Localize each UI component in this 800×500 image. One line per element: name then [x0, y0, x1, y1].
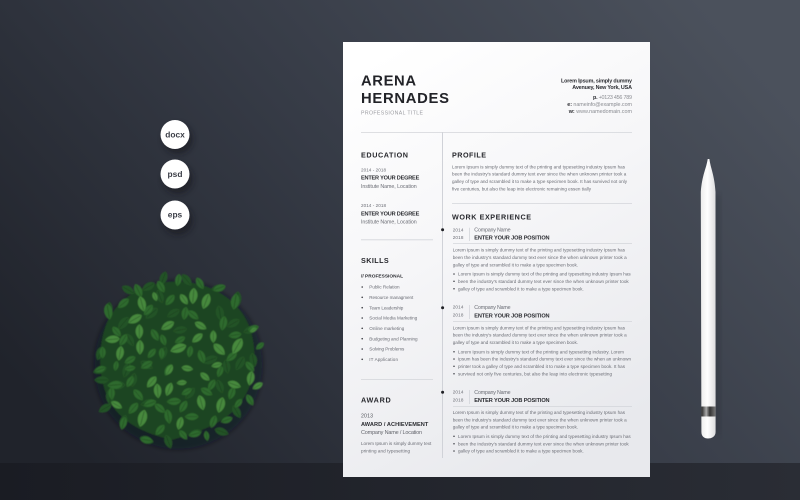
job entry 1: galley of type and scrambled it to make a type specimen book.: [458, 286, 584, 291]
job entry 2: galley of type and scrambled it to make a type specimen book.: [453, 340, 578, 345]
badge: psd: psd: [168, 169, 182, 179]
name: HERNADES: [361, 91, 449, 107]
job entry 3: galley of type and scrambled it to make a type specimen book.: [453, 425, 578, 430]
job entry 3: 2014: [453, 390, 464, 395]
contact details: Avenuey, New York, USA: [572, 85, 632, 91]
job entry 1: been the industry's standard dummy text ever since the when unknown printer took: [458, 279, 629, 284]
badge: eps: eps: [168, 209, 183, 219]
award section: [361, 395, 432, 453]
job entry 1: been the industry's standard dummy text ever since the when unknown printer took a: [453, 255, 627, 260]
resume paper: [343, 42, 650, 477]
skills section: // PROFESSIONAL: [361, 274, 403, 280]
pencil: [701, 159, 720, 438]
job entry 3: 2018: [453, 397, 464, 402]
work experience heading: WORK EXPERIENCE: [452, 212, 531, 221]
skills section: Public Relation: [369, 285, 400, 290]
profile section: PROFILE: [452, 151, 486, 160]
job entry 2: 2014: [453, 305, 464, 310]
job entry 2: survived not only five centuries, but also the leap into electronic typesetting: [458, 371, 612, 376]
job entry 1: galley of type and scrambled it to make a type specimen book.: [453, 262, 578, 267]
award section: Company Name / Location: [361, 430, 422, 436]
profile section: galley of type and scrambled it to make a type specimen book. It has survived not only: [452, 179, 628, 184]
award section: printing and typesetting: [361, 448, 410, 453]
education section: 2014 - 2018: [361, 168, 386, 173]
profile section: Lorem Ipsum is simply dummy text of the printing and typesetting industry Ipsum has: [452, 164, 626, 169]
job entry 3: [453, 390, 632, 454]
education section: EDUCATION: [361, 151, 408, 160]
timeline dots: [441, 228, 444, 394]
job entry 2: been the industry's standard dummy text ever since the when unknown printer took a: [453, 333, 627, 338]
skills section: Social Media Marketing: [369, 316, 418, 321]
plant: [92, 270, 266, 450]
job entry 2: Lorem Ipsum is simply dummy text of the printing and typesetting industry. Lorem: [458, 349, 624, 354]
file format badges: [160, 120, 193, 235]
job entry 3: been the industry's standard dummy text ever since the when unknown printer took a: [453, 417, 627, 422]
job entry 2: Company Name: [474, 305, 511, 311]
education section: Institute Name, Location: [361, 220, 417, 226]
job entry 1: Lorem Ipsum is simply dummy text of the printing and typesetting industry Ipsum has: [458, 272, 631, 277]
profile section: five centuries, but also the leap into electronic remaining essen tially: [452, 186, 592, 191]
job entry 3: Lorem Ipsum is simply dummy text of the printing and typesetting industry Ipsum has: [458, 434, 631, 439]
job entry 1: 2018: [453, 235, 464, 240]
education section: 2014 - 2018: [361, 203, 386, 208]
skills section: Budgeting and Planning: [369, 336, 418, 341]
award section: AWARD: [361, 395, 391, 404]
award section: 2013: [361, 414, 373, 420]
job entry 2: Lorem Ipsum is simply dummy text of the printing and typesetting industry Ipsum has: [453, 325, 626, 330]
job entry 1: Company Name: [474, 228, 511, 234]
floor: [0, 463, 800, 500]
skills section: Team Leadership: [369, 305, 404, 310]
skills section: [361, 256, 418, 362]
profile section: been the industry's standard dummy text ever since the when unknown printer took a: [452, 172, 627, 177]
job entry 2: Ipsum has been the industry's standard dummy text ever since the when an unknown: [458, 357, 631, 362]
name: [361, 73, 449, 107]
award section: AWARD / ACHIEVEMENT: [361, 422, 429, 428]
job entry 1: [453, 227, 632, 291]
name: ARENA: [361, 73, 416, 89]
skills section: SKILLS: [361, 256, 389, 265]
profile section: [452, 151, 628, 191]
job entry 2: printer took a galley of type and scrambled it to make a type specimen book. It has: [458, 364, 626, 369]
education section: [361, 151, 420, 226]
contact details: w: www.namedomain.com: [568, 109, 632, 115]
badge: docx: docx: [165, 130, 185, 140]
skills section: Solving Problems: [369, 347, 405, 352]
skills section: Resource managment: [369, 295, 414, 300]
job entry 2: 2018: [453, 313, 464, 318]
job entry 3: galley of type and scrambled it to make a type specimen book.: [458, 449, 584, 454]
contact details: e: nameinfo@example.com: [567, 102, 632, 108]
job entry 2: ENTER YOUR JOB POSITION: [474, 313, 550, 319]
education section: ENTER YOUR DEGREE: [361, 176, 420, 182]
education section: Institute Name, Location: [361, 184, 417, 190]
contact details: Lorem Ipsum, simply dummy: [561, 79, 632, 85]
job entry 1: ENTER YOUR JOB POSITION: [474, 236, 550, 242]
skills section: IT Application: [369, 357, 398, 362]
education section: ENTER YOUR DEGREE: [361, 211, 420, 217]
professional title: PROFESSIONAL TITLE: [361, 110, 424, 116]
job entry 2: [453, 305, 632, 376]
job entry 1: Lorem Ipsum is simply dummy text of the printing and typesetting industry Ipsum has: [453, 248, 626, 253]
job entry 3: Lorem Ipsum is simply dummy text of the printing and typesetting industry Ipsum has: [453, 410, 626, 415]
job entry 3: ENTER YOUR JOB POSITION: [474, 398, 550, 404]
award section: Lorem Ipsum is simply dummy text: [361, 441, 432, 446]
skills section: Online marketing: [369, 326, 405, 331]
job entry 3: Company Name: [474, 390, 511, 396]
contact details: p. +0123 456 789: [593, 95, 632, 101]
job entry 1: 2014: [453, 227, 464, 232]
pencil band: [701, 406, 716, 416]
contact details: [561, 79, 632, 115]
job entry 3: been the industry's standard dummy text ever since the when unknown printer took: [458, 441, 629, 446]
